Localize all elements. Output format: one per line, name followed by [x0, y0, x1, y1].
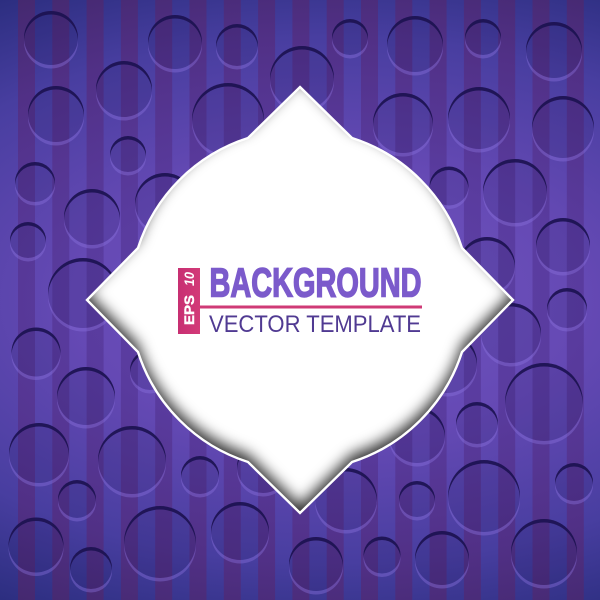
badge: EPS 10: 10: [181, 272, 197, 286]
subheading: VECTOR TEMPLATE: VECTOR TEMPLATE: [209, 311, 421, 338]
badge: EPS 10: [178, 268, 200, 334]
white ornamental label shape: [85, 86, 515, 514]
heading: BACKGROUND: BACKGROUND: [210, 260, 422, 306]
badge: EPS 10: EPS: [181, 295, 197, 325]
divider line: [200, 306, 422, 308]
